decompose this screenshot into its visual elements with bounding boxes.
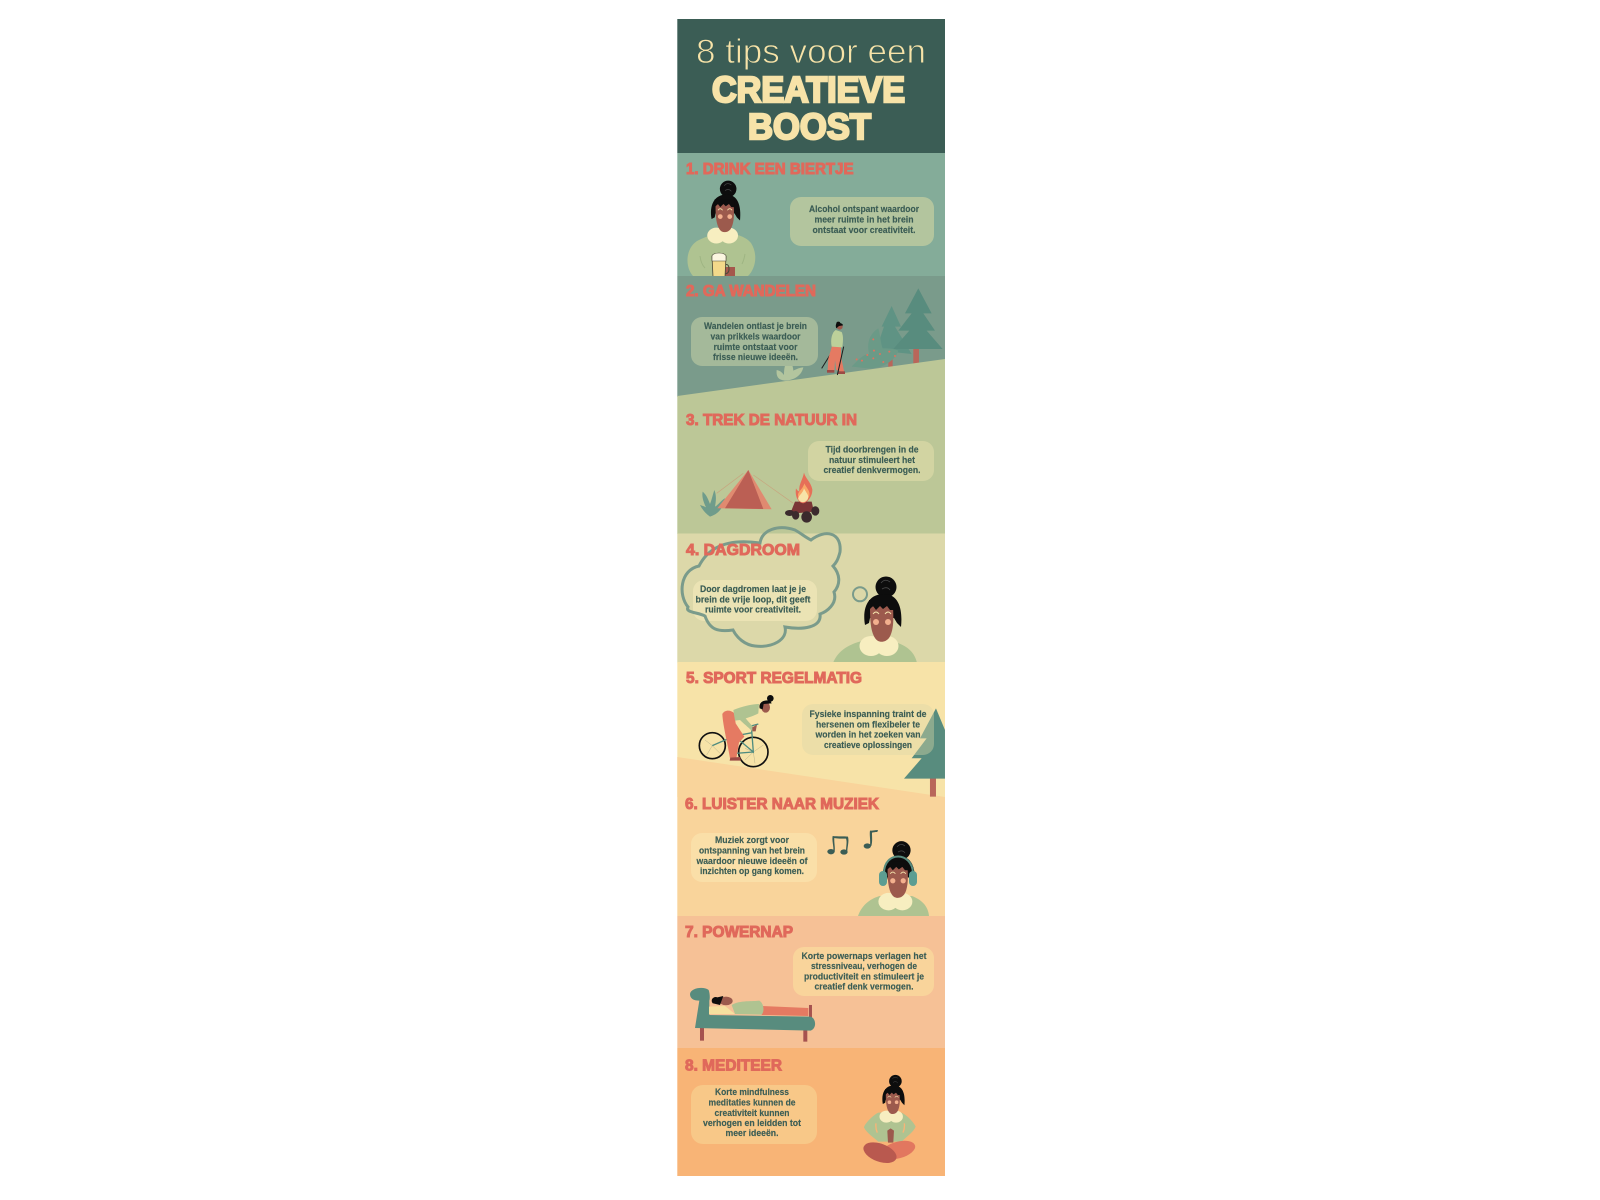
text bubble tip 5: Fysieke inspanning traint de xyxy=(810,708,926,719)
text bubble tip 2: frisse nieuwe ideeën. xyxy=(713,351,798,362)
text bubble tip 8 xyxy=(691,1085,817,1144)
illustration: cyclist xyxy=(699,695,774,767)
text bubble tip 7: creatief denk vermogen. xyxy=(814,980,914,992)
illustration: woman with beer xyxy=(687,181,755,277)
heading tip 2: 2. GA WANDELEN xyxy=(686,283,816,300)
text bubble tip 6: Muziek zorgt voor xyxy=(715,834,789,845)
text bubble tip 4: ruimte voor creativiteit. xyxy=(705,604,801,614)
illustration: plant, tent and campfire xyxy=(700,470,819,523)
text bubble tip 4: Door dagdromen laat je je xyxy=(700,583,806,594)
text bubble tip 8: meditaties kunnen de xyxy=(708,1096,796,1108)
heading tip 4: 4. DAGDROOM xyxy=(686,542,800,559)
text bubble tip 8: meer ideeën. xyxy=(726,1127,778,1138)
title line 3: BOOST xyxy=(748,106,871,147)
text bubble tip 3: Tijd doorbrengen in de xyxy=(826,444,918,454)
text bubble tip 6 xyxy=(691,833,817,882)
heading tip 6: 6. LUISTER NAAR MUZIEK xyxy=(685,796,880,813)
heading tip 7: 7. POWERNAP xyxy=(685,924,793,941)
text bubble tip 1 xyxy=(790,197,934,246)
icon: music notes xyxy=(827,830,878,855)
text bubble tip 1: meer ruimte in het brein xyxy=(814,214,914,224)
text bubble tip 7: Korte powernaps verlagen het xyxy=(802,950,926,961)
illustration: tree xyxy=(904,708,945,797)
heading tip 8: 8. MEDITEER xyxy=(685,1058,782,1074)
infographic page xyxy=(677,19,945,1176)
text bubble tip 2: Wandelen ontlast je brein xyxy=(704,320,807,331)
text bubble tip 5: hersenen om flexibeler te xyxy=(816,718,920,730)
panel: tip 8 mediteer xyxy=(677,1048,945,1176)
text bubble tip 7 xyxy=(793,947,934,996)
text bubble tip 8: verhogen en leidden tot xyxy=(703,1117,801,1128)
text bubble tip 7: productiviteit en stimuleert je xyxy=(804,970,924,982)
text bubble tip 1: Alcohol ontspant waardoor xyxy=(809,203,919,214)
text bubble tip 4: brein de vrije loop, dit geeft xyxy=(696,594,810,604)
panel: tip 6 luister naar muziek xyxy=(677,796,945,916)
panel: tip 3 trek de natuur in xyxy=(677,397,945,534)
title line 2: CREATIEVE xyxy=(712,69,905,110)
text bubble tip 2: ruimte ontstaat voor xyxy=(714,341,798,352)
text bubble tip 8: Korte mindfulness xyxy=(715,1086,789,1097)
heading tip 1: 1. DRINK EEN BIERTJE xyxy=(686,161,854,178)
plant xyxy=(777,358,803,381)
thought cloud xyxy=(682,528,867,646)
text bubble tip 3: creatief denkvermogen. xyxy=(824,464,920,475)
text bubble tip 6: inzichten op gang komen. xyxy=(700,865,804,876)
illustration: woman with headphones xyxy=(858,841,929,916)
text bubble tip 5 xyxy=(802,704,934,755)
hill xyxy=(677,757,945,797)
panel: tip 7 powernap xyxy=(677,916,945,1048)
panel: tip 4 dagdroom xyxy=(677,528,945,663)
text bubble tip 5: creatieve oplossingen xyxy=(824,739,912,750)
illustration: sofa with sleeping woman xyxy=(690,988,815,1042)
text bubble tip 1: ontstaat voor creativiteit. xyxy=(812,224,916,235)
illustration: meditating woman xyxy=(861,1075,917,1167)
text bubble tip 3: natuur stimuleert het xyxy=(829,454,915,465)
text bubble tip 7: stressniveau, verhogen de xyxy=(811,960,917,971)
heading tip 5: 5. SPORT REGELMATIG xyxy=(686,670,862,687)
text bubble tip 2 xyxy=(691,317,818,366)
panel: tip 2 ga wandelen xyxy=(677,276,945,397)
text bubble tip 8: creativiteit kunnen xyxy=(714,1107,790,1118)
text bubble tip 3 xyxy=(808,441,934,481)
panel: tip 5 sport regelmatig xyxy=(677,662,945,797)
text bubble tip 2: van prikkels waardoor xyxy=(710,330,801,342)
illustration: hiker xyxy=(822,322,845,375)
text bubble tip 6: waardoor nieuwe ideeën of xyxy=(696,855,808,866)
text bubble tip 6: ontspanning van het brein xyxy=(699,844,805,856)
hill xyxy=(677,359,945,397)
text bubble tip 5: worden in het zoeken van xyxy=(815,728,921,740)
heading tip 3: 3. TREK DE NATUUR IN xyxy=(686,412,857,429)
text bubble tip 4 xyxy=(693,580,817,621)
panel: tip 1 drink een biertje xyxy=(677,153,945,277)
illustration: daydreaming woman xyxy=(833,576,917,663)
title line 1: 8 tips voor een xyxy=(696,33,926,71)
illustration: trees and bush xyxy=(852,288,943,368)
panel: header xyxy=(677,19,945,153)
